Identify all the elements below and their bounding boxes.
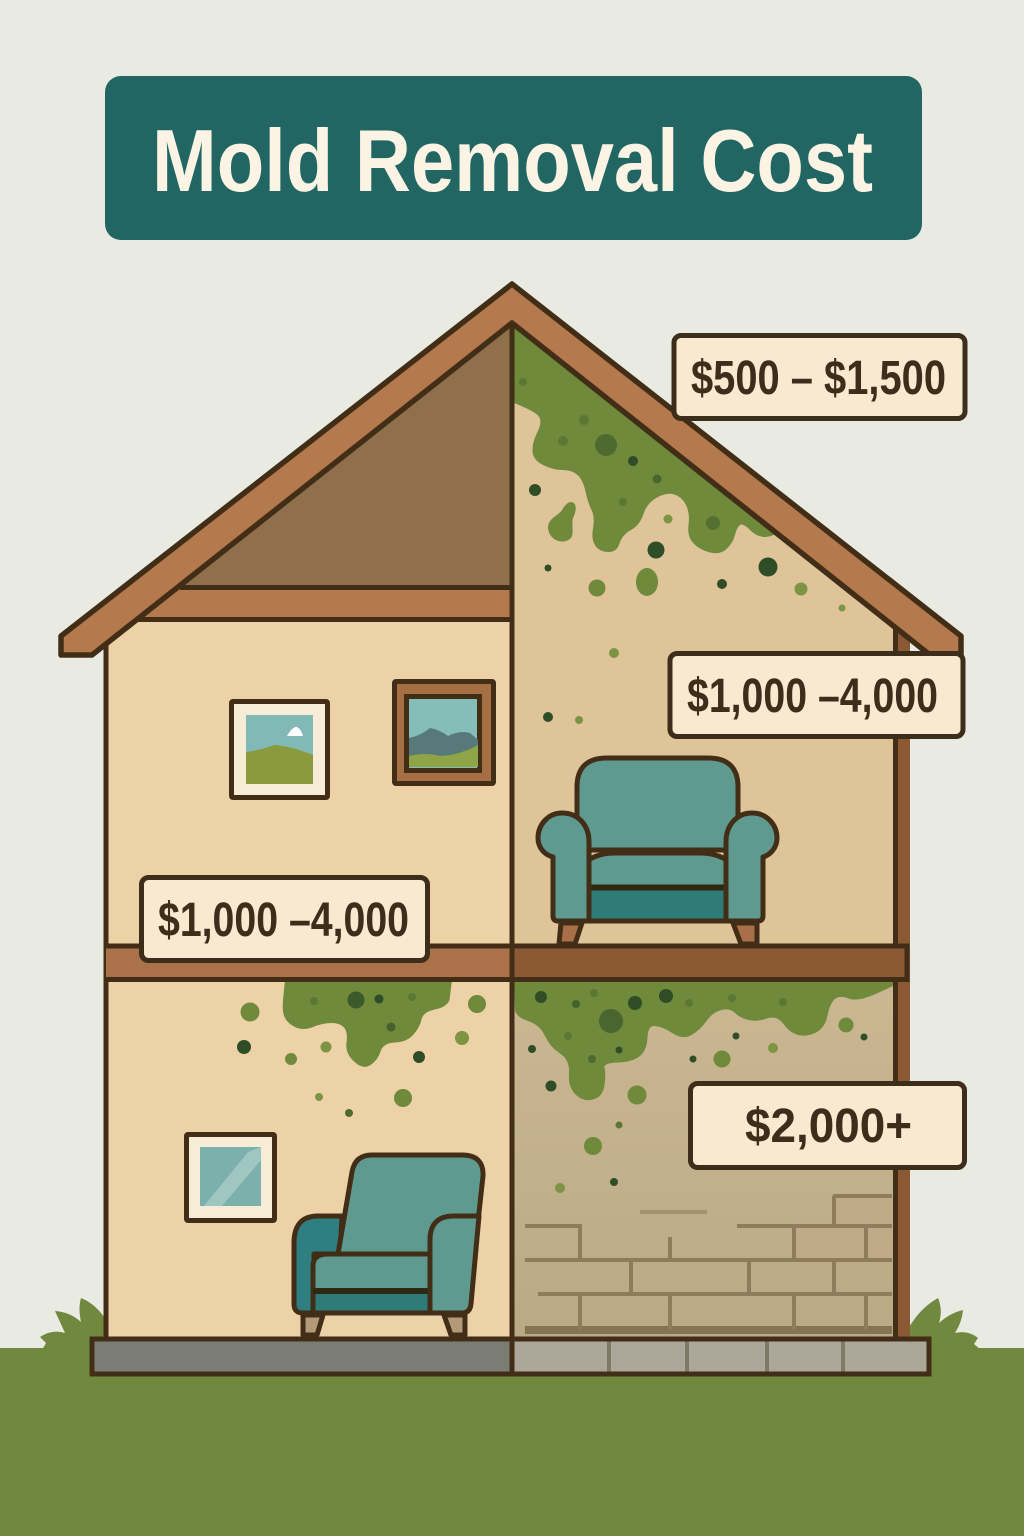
callout: upper room cost — [670, 654, 963, 736]
exposed brick wall — [525, 1196, 892, 1330]
right exterior timber — [895, 620, 910, 1340]
panel: lower left room wall — [106, 980, 512, 1338]
title banner: Mold Removal Cost — [152, 111, 873, 210]
callout: basement cost: $2,000+ — [745, 1100, 912, 1153]
callout: attic cost: $500 – $1,500 — [691, 352, 946, 405]
callout: lower room cost — [142, 878, 428, 960]
icon: armchair, lower room — [294, 1155, 483, 1335]
callout: attic cost — [674, 336, 965, 418]
callout: upper room cost: $1,000 –4,000 — [687, 670, 938, 723]
panel: basement wall — [512, 980, 896, 1338]
panel: upper right room wall — [512, 321, 896, 946]
callout: basement cost — [690, 1084, 964, 1168]
center divider wall line — [510, 321, 514, 1376]
icon: left bush — [40, 1298, 106, 1350]
panel: upper left room wall — [106, 610, 512, 945]
icon: armchair, upper room — [538, 758, 777, 944]
icon: framed window — [186, 1134, 274, 1220]
ground: grass — [0, 1348, 1024, 1536]
mold: lower left room ceiling patch — [237, 980, 486, 1117]
mold: basement patch — [514, 980, 893, 1193]
floor beam — [106, 946, 907, 980]
roof — [61, 284, 961, 655]
left exterior wall line — [104, 640, 108, 1340]
callout: lower room cost: $1,000 –4,000 — [158, 894, 409, 947]
attic beam — [134, 587, 512, 620]
mold: attic patch — [514, 320, 846, 724]
icon: framed picture, hill and cloud — [232, 702, 328, 798]
foundation — [92, 1339, 929, 1374]
panel: attic left — [180, 323, 512, 587]
icon: right bush — [908, 1298, 981, 1350]
icon: framed picture, mountains — [394, 682, 494, 784]
title banner — [105, 76, 922, 240]
